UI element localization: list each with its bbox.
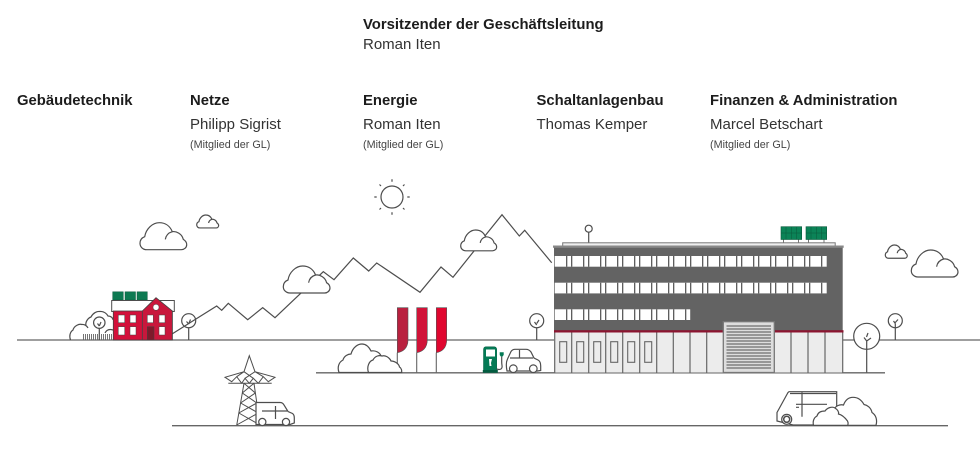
right bushes	[813, 397, 877, 425]
electric car	[506, 349, 541, 373]
title block: chairman: Vorsitzender der Geschäftsleitung	[363, 17, 604, 33]
left bushes and fence	[70, 311, 113, 340]
red band	[554, 330, 844, 332]
roller door	[723, 322, 774, 372]
ground floor	[555, 331, 843, 372]
column: Energie	[363, 93, 443, 151]
mountain line	[172, 215, 552, 334]
column: Netze: Philipp Sigrist	[190, 116, 282, 133]
column: Finanzen und Administration: Finanzen & Administration	[710, 93, 897, 109]
cloud 1	[140, 223, 187, 250]
ground lines	[17, 340, 980, 426]
column: Energie: Roman Iten	[363, 116, 441, 133]
ground floor windows	[560, 342, 652, 362]
van right	[777, 392, 837, 425]
column: Finanzen und Administration: Marcel Betschart	[710, 116, 823, 133]
title block: chairman: Roman Iten	[363, 36, 441, 53]
column: Netze: Netze	[190, 93, 230, 109]
van at pylon	[256, 402, 294, 426]
antenna	[585, 225, 592, 243]
column: Netze: (Mitglied der GL)	[190, 139, 270, 151]
window bands	[555, 256, 827, 320]
icon: sun	[374, 179, 410, 215]
column: Schaltanlagenbau: Thomas Kemper	[536, 116, 647, 133]
cloud 3	[283, 266, 330, 293]
cloud 2	[197, 215, 219, 228]
column: Energie: Energie	[363, 93, 417, 109]
column: Schaltanlagenbau	[536, 93, 664, 133]
column: Gebäudetechnik: Gebäudetechnik	[17, 93, 133, 109]
small tree right	[888, 314, 902, 340]
column: Finanzen und Administration: (Mitglied der GL)	[710, 139, 790, 151]
solar panels on house	[113, 292, 147, 300]
column: Netze	[190, 93, 282, 151]
pylon	[225, 356, 275, 425]
large tree right	[854, 323, 880, 372]
centre bushes	[338, 344, 402, 372]
solar panels on building	[781, 227, 827, 243]
title block: chairman	[363, 17, 604, 53]
column: Finanzen und Administration	[710, 93, 897, 151]
charging station	[483, 347, 504, 373]
flags	[397, 308, 447, 373]
tree by the charger	[530, 314, 544, 340]
cloud 4	[461, 230, 497, 251]
house	[112, 292, 174, 340]
building	[553, 225, 844, 372]
column: Energie: (Mitglied der GL)	[363, 139, 443, 151]
cloud 6	[911, 250, 958, 277]
tree by the house	[182, 314, 196, 340]
cloud 5	[885, 245, 907, 258]
column: Schaltanlagenbau: Schaltanlagenbau	[536, 93, 664, 109]
